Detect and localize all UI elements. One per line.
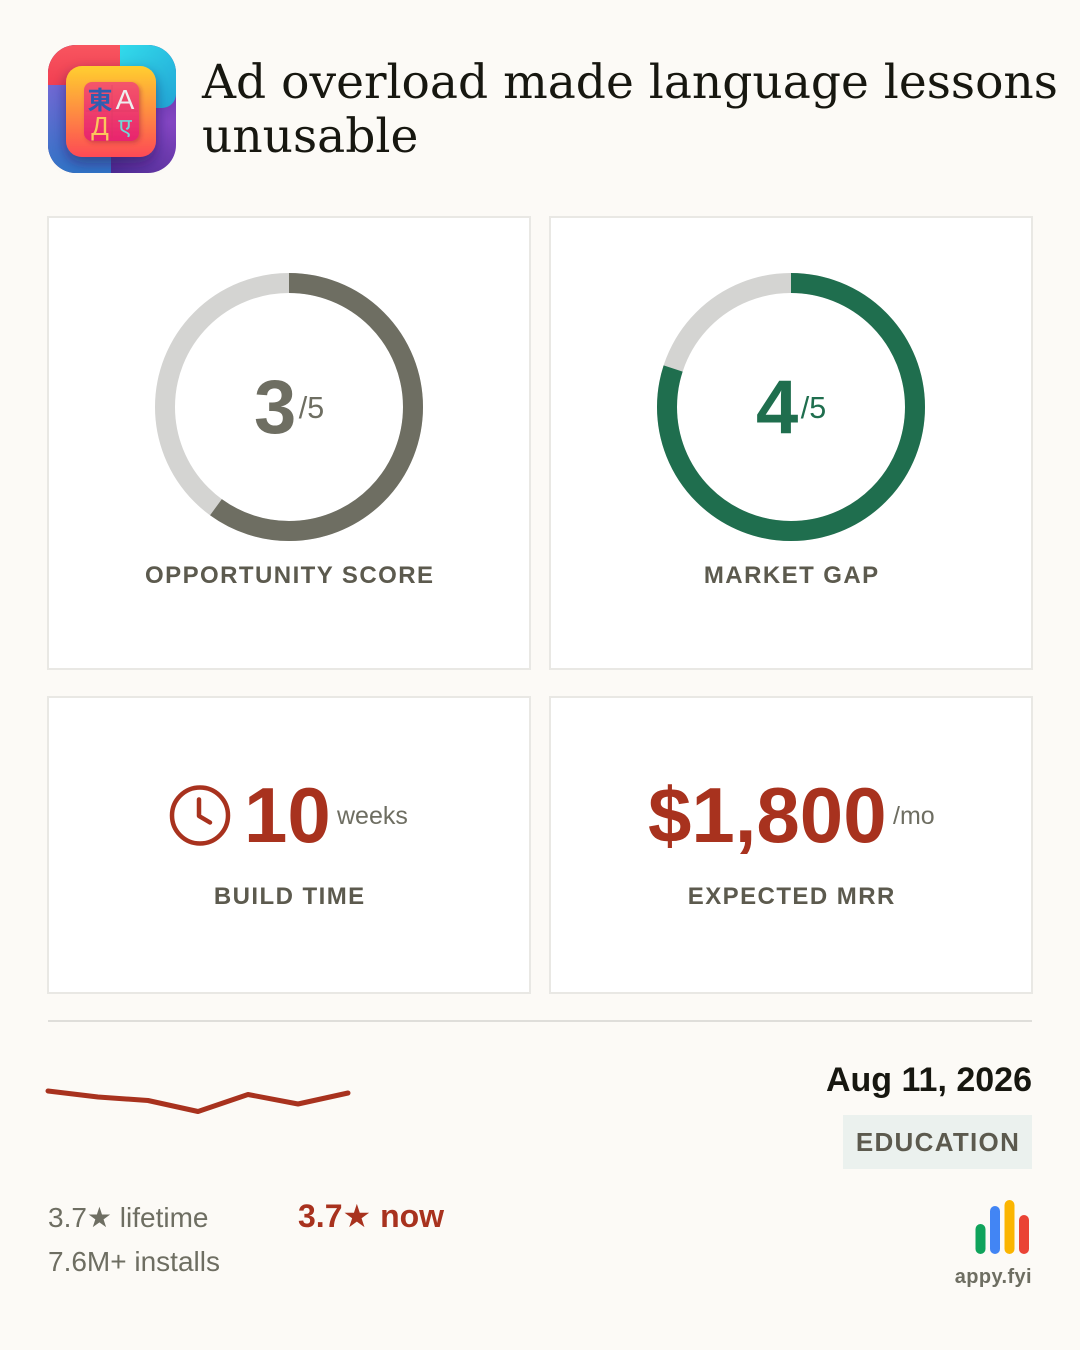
icon: app icon with language glyphs xyxy=(48,45,176,173)
category tag xyxy=(843,1115,1032,1169)
category tag: EDUCATION xyxy=(856,1127,1020,1157)
icon: app icon with language glyphs: 東 xyxy=(87,81,113,117)
label: EXPECTED MRR xyxy=(688,882,896,910)
panel: opportunity score xyxy=(47,216,531,670)
chart: opportunity score ring xyxy=(155,273,423,541)
chart: market gap ring xyxy=(657,273,925,541)
date: Aug 11, 2026 xyxy=(826,1061,1032,1099)
mrr value: $1,800 xyxy=(648,771,887,859)
panel: build time xyxy=(47,696,531,994)
panel: expected mrr xyxy=(549,696,1033,994)
chart: rating sparkline xyxy=(46,1088,350,1114)
install count: 7.6M+ installs xyxy=(48,1246,220,1277)
label: OPPORTUNITY SCORE xyxy=(145,562,434,589)
panel: market gap xyxy=(549,216,1033,670)
icon: app icon with language glyphs: A xyxy=(116,84,135,115)
score value: 3/5 xyxy=(254,365,324,450)
brand name: appy.fyi xyxy=(955,1266,1032,1288)
current rating: 3.7★ now xyxy=(298,1198,444,1234)
title: Ad overload made language lessons xyxy=(202,55,1058,110)
score value: 4/5 xyxy=(756,365,826,450)
unit: weeks xyxy=(337,802,408,830)
title: unusable xyxy=(202,109,418,164)
lifetime rating: 3.7★ lifetime xyxy=(48,1202,208,1233)
icon: app icon with language glyphs: Д xyxy=(91,111,109,141)
title xyxy=(202,55,1058,164)
icon: clock xyxy=(170,785,230,846)
icon: bars xyxy=(976,1200,1029,1254)
icon: app icon with language glyphs: ए xyxy=(118,113,132,141)
logo: appy.fyi xyxy=(955,1200,1032,1288)
build time value: 10 xyxy=(244,771,331,859)
label: BUILD TIME xyxy=(214,882,366,910)
unit: /mo xyxy=(893,802,935,830)
label: MARKET GAP xyxy=(704,562,880,589)
